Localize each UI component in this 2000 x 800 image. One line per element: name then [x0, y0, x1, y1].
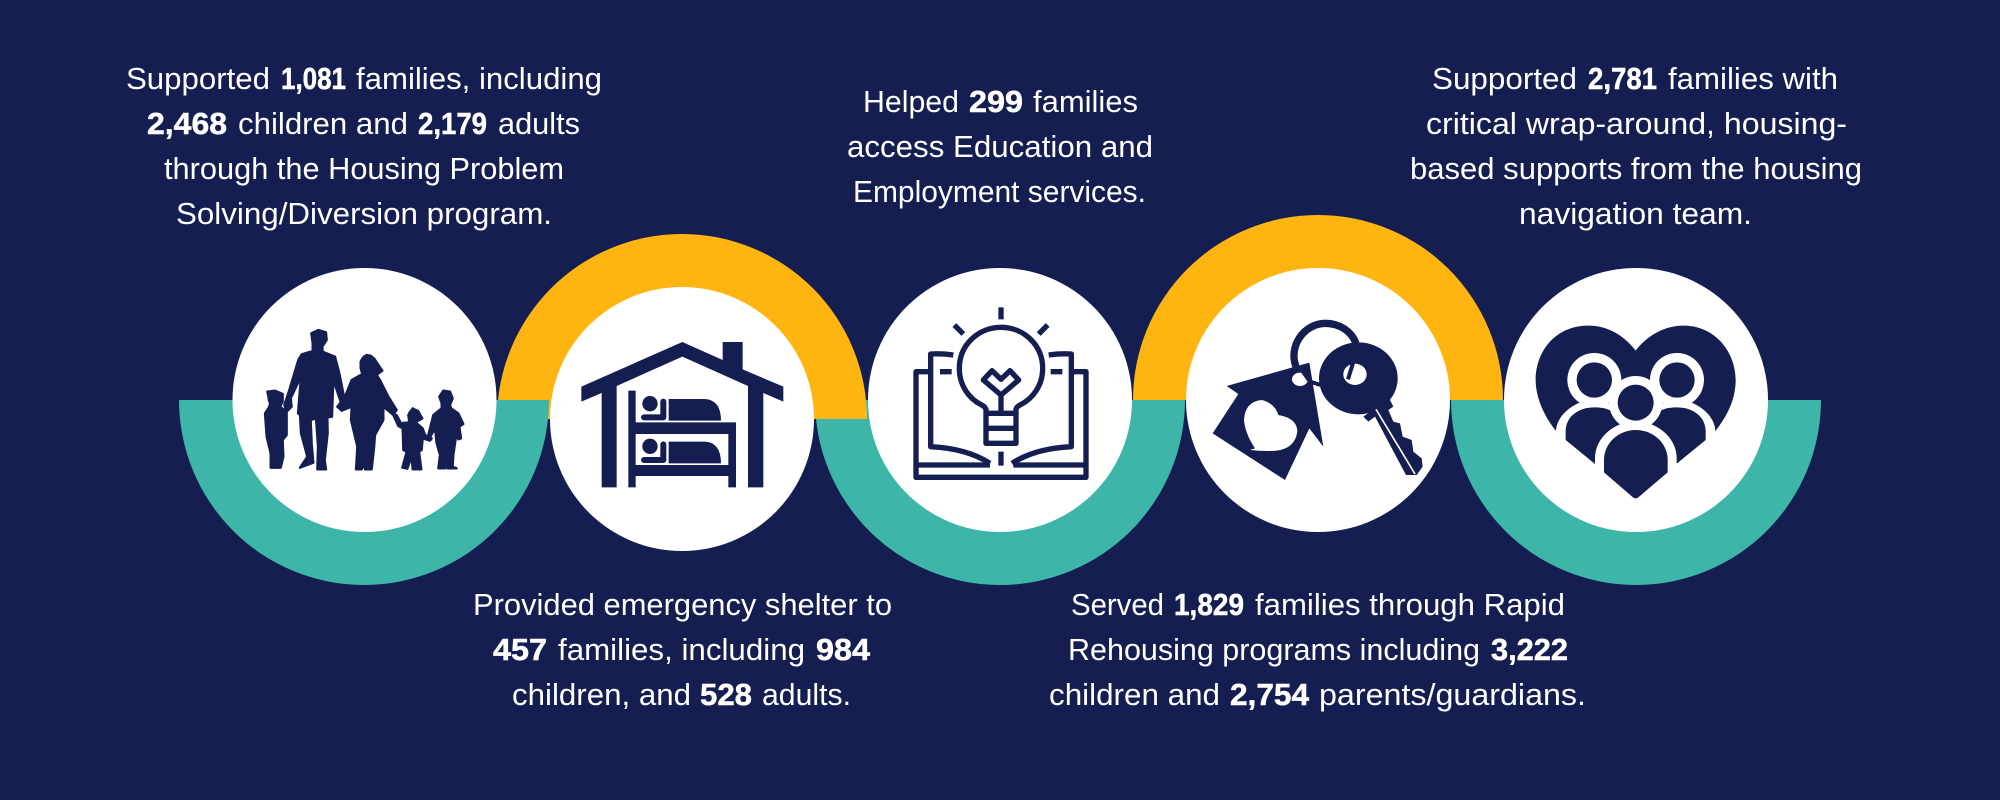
- text: emergency shelter: 457: [493, 632, 547, 667]
- text: rapid rehousing: 2,754: [1230, 677, 1310, 712]
- text: emergency shelter: 984: [816, 632, 871, 667]
- text: housing problem solving: 1,081: [281, 61, 346, 96]
- panel: family circle: [232, 268, 496, 532]
- text: housing navigation team: navigation team.: [1519, 196, 1752, 231]
- text: education and employment: families: [1033, 84, 1138, 119]
- text: emergency shelter: families, including: [558, 632, 805, 667]
- text: housing navigation team: based supports from the housing: [1410, 151, 1862, 186]
- text: emergency shelter: Provided emergency shelter to: [473, 587, 892, 622]
- text: education and employment: access Education and: [847, 129, 1153, 164]
- text: education and employment: Employment services.: [853, 174, 1146, 209]
- icon: house key fob and key: [1213, 323, 1423, 480]
- text: education and employment: 299: [969, 84, 1023, 119]
- panel: education circle: [868, 268, 1132, 532]
- text: housing navigation team: [1410, 61, 1862, 231]
- text: housing navigation team: 2,781: [1588, 61, 1657, 96]
- text: housing problem solving: Solving/Diversion program.: [176, 196, 552, 231]
- panel: shelter circle: [550, 287, 814, 551]
- text: housing navigation team: critical wrap-around, housing-: [1426, 106, 1847, 141]
- text: rapid rehousing: children and: [1049, 677, 1220, 712]
- text: housing problem solving: through the Housing Problem: [164, 151, 564, 186]
- wave: orange arc 2: [497, 234, 867, 419]
- wave: teal arc 1: [179, 400, 549, 585]
- text: emergency shelter: [473, 587, 892, 712]
- text: housing problem solving: children and: [238, 106, 408, 141]
- text: rapid rehousing: 3,222: [1491, 632, 1568, 667]
- text: rapid rehousing: 1,829: [1174, 587, 1244, 622]
- text: rapid rehousing: Rehousing programs including: [1068, 632, 1480, 667]
- text: emergency shelter: adults.: [762, 677, 851, 712]
- text: education and employment: [847, 84, 1153, 209]
- text: rapid rehousing: [1049, 587, 1586, 712]
- text: emergency shelter: children, and: [512, 677, 691, 712]
- icon: family silhouette: [265, 330, 463, 469]
- icon: house with bunk bed: [581, 342, 783, 487]
- text: rapid rehousing: Served: [1071, 587, 1164, 622]
- text: rapid rehousing: parents/guardians.: [1319, 677, 1586, 712]
- panel: heart family circle: [1504, 268, 1768, 532]
- text: housing problem solving: families, including: [356, 61, 602, 96]
- text: rapid rehousing: families through Rapid: [1255, 587, 1565, 622]
- text: housing navigation team: Supported: [1432, 61, 1577, 96]
- text: housing navigation team: families with: [1668, 61, 1838, 96]
- icon: family inside heart: [1536, 326, 1736, 503]
- text: housing problem solving: 2,468: [147, 106, 227, 141]
- panel: keys circle: [1186, 268, 1450, 532]
- text: housing problem solving: adults: [498, 106, 580, 141]
- icon: lightbulb over open book: [916, 307, 1086, 477]
- text: housing problem solving: [126, 61, 602, 231]
- text: emergency shelter: 528: [700, 677, 752, 712]
- wave: teal arc 3: [815, 400, 1185, 585]
- text: education and employment: Helped: [863, 84, 959, 119]
- wave: teal arc 5: [1451, 400, 1821, 585]
- text: housing problem solving: 2,179: [418, 106, 487, 141]
- text: housing problem solving: Supported: [126, 61, 270, 96]
- wave: orange arc 4: [1133, 215, 1503, 400]
